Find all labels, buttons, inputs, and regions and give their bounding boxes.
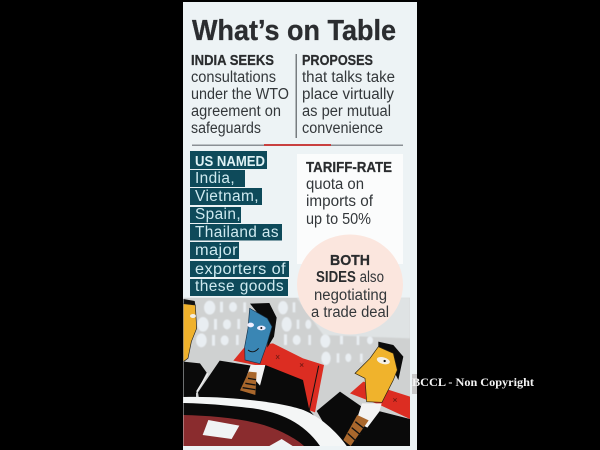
character: right man <box>317 342 410 446</box>
panel: US named <box>190 151 289 296</box>
callout: both sides: a trade deal <box>311 304 389 321</box>
callout: both sides: SIDES also <box>316 269 384 286</box>
text block: proposes: as per mutual <box>302 103 391 120</box>
panel: US named: these goods <box>195 278 284 295</box>
infographic panel background <box>183 2 417 450</box>
panel: US named: major <box>195 242 238 259</box>
binary pattern <box>196 301 373 365</box>
callout: both sides: negotiating <box>314 287 387 304</box>
watermark: BCCL - Non Copyright <box>412 375 534 389</box>
panel: US named: Thailand as <box>195 224 279 241</box>
panel: US named: exporters of <box>195 261 286 278</box>
text block: India seeks: agreement on <box>191 103 281 120</box>
panel: tariff-rate: up to 50% <box>306 211 371 228</box>
text block: proposes: convenience <box>302 120 383 137</box>
text block: proposes: that talks take <box>302 69 395 86</box>
text block: proposes: place virtually <box>302 86 394 103</box>
text block: proposes <box>302 52 395 137</box>
title: What’s on Table <box>192 15 396 47</box>
text block: India seeks <box>191 52 289 137</box>
text block: India seeks: under the WTO <box>191 86 289 103</box>
papers <box>203 420 293 446</box>
panel: US named: Vietnam, <box>195 188 259 205</box>
panel: tariff-rate: quota on <box>306 176 364 193</box>
panel: tariff-rate <box>297 154 403 264</box>
character: blue man <box>198 303 324 417</box>
panel: US named: India, <box>195 170 235 187</box>
callout: both sides: BOTH <box>330 252 370 269</box>
callout: both sides <box>297 234 403 334</box>
table <box>183 397 347 446</box>
character: left man <box>183 299 208 402</box>
panel: tariff-rate: imports of <box>306 193 374 210</box>
text block: India seeks: safeguards <box>191 120 261 137</box>
text block: India seeks: INDIA SEEKS <box>191 52 274 69</box>
text block: proposes: PROPOSES <box>302 52 373 69</box>
panel: US named: US NAMED <box>195 153 265 170</box>
panel: US named: Spain, <box>195 206 241 223</box>
illustration: negotiators around a table <box>183 298 410 446</box>
panel: tariff-rate: TARIFF-RATE <box>306 159 392 176</box>
text block: India seeks: consultations <box>191 69 276 86</box>
